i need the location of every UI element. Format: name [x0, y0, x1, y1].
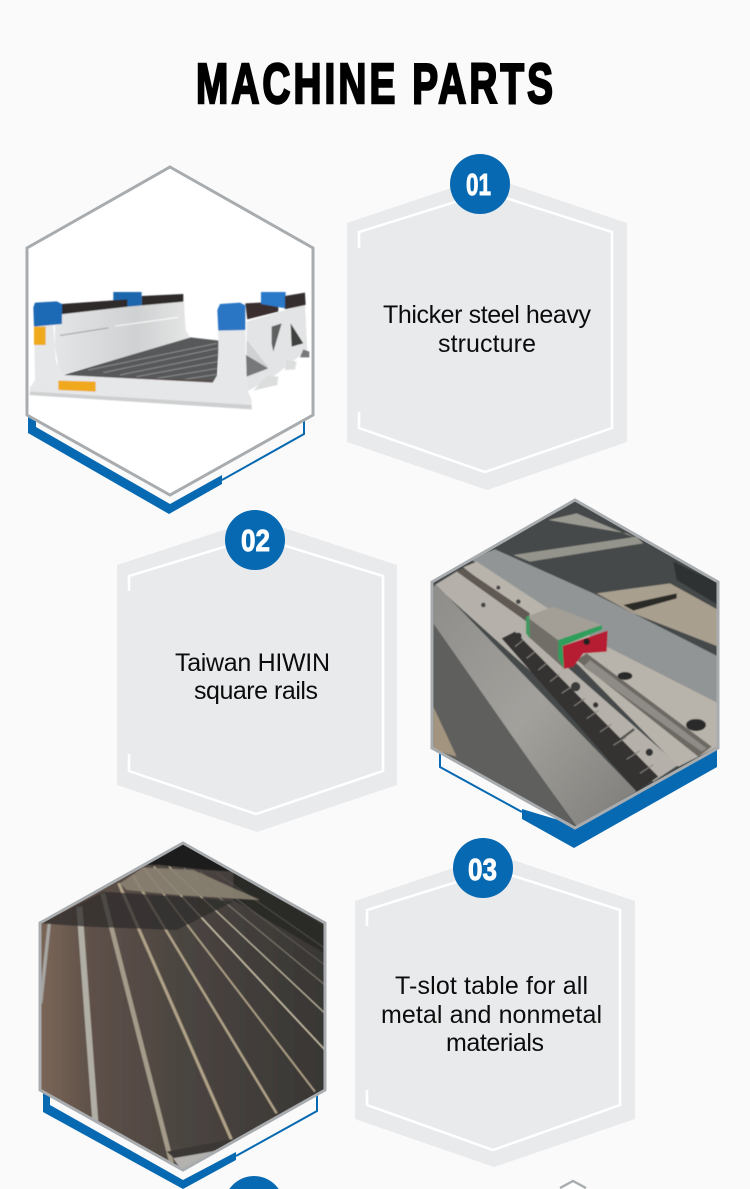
panel: image hexagon 1 — [27, 167, 313, 514]
panel: text hexagon 02 — [117, 510, 397, 832]
panel background — [347, 176, 627, 490]
caption 02: Taiwan HIWIN — [175, 649, 330, 677]
blue hexagon accent 2 — [440, 749, 717, 848]
number badge 03 — [453, 838, 513, 898]
number badge 01: 01 — [466, 167, 491, 202]
number badge 02: 02 — [241, 523, 270, 558]
caption 03: materials — [446, 1029, 544, 1057]
caption 01: structure — [438, 330, 536, 358]
caption 02 — [175, 649, 330, 705]
inner white outline — [129, 537, 383, 814]
inner white outline — [359, 192, 612, 472]
panel: text hexagon 01 — [347, 154, 627, 490]
caption 03: metal and nonmetal — [381, 1001, 602, 1029]
hexagon outline 2 — [432, 500, 718, 828]
number badge 03: 03 — [468, 852, 497, 887]
hexagon outline 1 — [27, 167, 313, 495]
inner white outline — [367, 870, 620, 1150]
panel background — [117, 519, 397, 832]
photo: machine frame — [29, 291, 310, 410]
photo: linear rail and rack — [430, 497, 720, 830]
caption 03: T-slot table for all — [395, 972, 588, 1000]
panel background — [355, 854, 635, 1167]
image hexagon 4 cropped at page bottom — [562, 1182, 584, 1189]
caption 01: Thicker steel heavy — [383, 301, 592, 329]
number badge 01 — [450, 154, 510, 214]
number badge 04 cropped at page bottom — [229, 1176, 279, 1189]
panel: text hexagon 03 — [355, 838, 635, 1167]
panel: image hexagon 3 — [37, 840, 330, 1189]
caption 02: square rails — [194, 677, 318, 705]
number badge 02 — [225, 510, 285, 570]
blue hexagon accent 1 — [28, 415, 304, 514]
photo: T-slot table — [37, 840, 330, 1173]
panel: image hexagon 2 — [430, 497, 720, 848]
title: MACHINE PARTS — [196, 53, 553, 116]
caption 01 — [383, 301, 592, 358]
caption 03 — [381, 972, 602, 1057]
blue hexagon accent 3 — [43, 1093, 317, 1189]
hexagon outline 3 — [40, 843, 325, 1170]
image hexagon 4 outline — [560, 1181, 586, 1188]
